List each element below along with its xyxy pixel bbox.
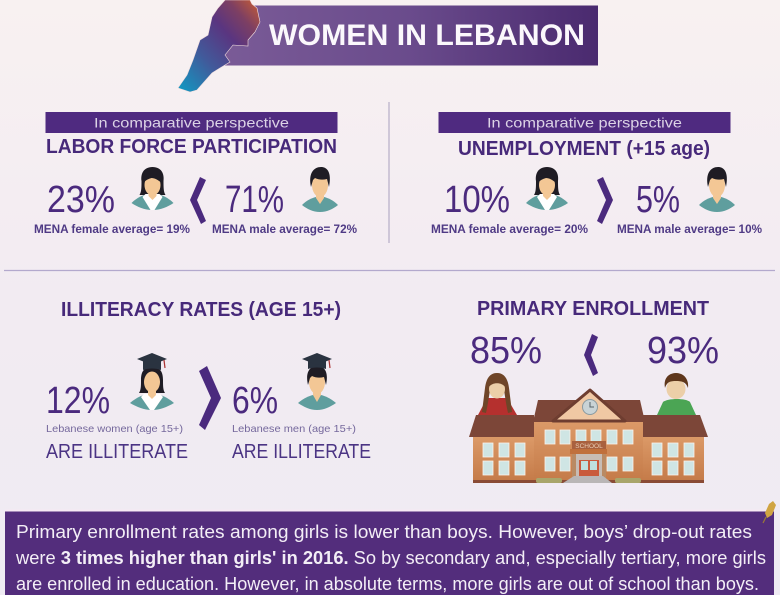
heading: ILLITERACY RATES (AGE 15+) <box>61 299 341 321</box>
icon: woman <box>526 167 568 210</box>
panel: unemployment <box>431 112 762 236</box>
school sign: SCHOOL <box>575 443 603 450</box>
heading: PRIMARY ENROLLMENT <box>477 298 709 320</box>
stat: men 5%: 5% <box>636 179 680 221</box>
icon: boy <box>657 373 696 415</box>
icon: man <box>699 167 735 212</box>
caption: MENA female average: MENA female average= 20% <box>431 224 588 236</box>
note line 2: were 3 times higher than girls' in 2016. So by secondary and, especially tertiary, more girls <box>15 548 766 568</box>
comparative bar <box>438 112 730 133</box>
stat: girls 85%: 85% <box>470 330 542 372</box>
arrow: greater than <box>597 177 613 224</box>
icon: woman <box>132 167 174 210</box>
caption: MENA female average: MENA female average= 19% <box>34 224 190 236</box>
label: men illiterate: ARE ILLITERATE <box>232 441 371 463</box>
callout: enrollment note <box>5 510 774 595</box>
comparative bar <box>46 112 338 133</box>
note line 1: Primary enrollment rates among girls is lower than boys. However, boys’ drop-out rates <box>16 522 752 542</box>
panel: primary enrollment <box>469 298 719 483</box>
icon: graduate man <box>298 353 336 410</box>
stat: men 6%: 6% <box>232 380 278 422</box>
title text: WOMEN IN LEBANON <box>269 19 585 52</box>
map of Lebanon icon <box>178 0 260 92</box>
arrow: less than <box>190 177 206 224</box>
title banner <box>222 6 598 66</box>
school entrance <box>536 449 641 483</box>
school sign <box>572 441 606 450</box>
arrow: greater than <box>199 366 221 430</box>
caption: Lebanese women: Lebanese women (age 15+) <box>46 423 183 435</box>
caption: MENA male average: MENA male average= 72% <box>212 224 357 236</box>
stat: women 10%: 10% <box>444 179 510 221</box>
comparative bar: In comparative perspective <box>94 114 289 130</box>
windows <box>483 430 694 475</box>
icon: man <box>302 167 338 212</box>
stat: men 71%: 71% <box>225 179 284 221</box>
stat: women 12%: 12% <box>46 380 110 422</box>
icon: graduate woman <box>130 353 174 410</box>
heading: UNEMPLOYMENT (+15 age) <box>458 138 710 160</box>
panel: labor force participation <box>34 112 357 236</box>
caption: Lebanese men: Lebanese men (age 15+) <box>232 423 356 435</box>
stat: boys 93%: 93% <box>647 330 719 372</box>
note line 3: are enrolled in education. However, in absolute terms, more girls are out of school than boys. <box>16 574 759 594</box>
panel: illiteracy rates <box>46 299 371 463</box>
comparative bar: In comparative perspective <box>487 114 682 130</box>
icon: pin <box>763 501 776 523</box>
heading: LABOR FORCE PARTICIPATION <box>46 136 337 158</box>
caption: MENA male average: MENA male average= 10% <box>617 224 762 236</box>
icon: girl <box>478 373 517 415</box>
arrow: less than <box>584 334 598 376</box>
label: women illiterate: ARE ILLITERATE <box>46 441 188 463</box>
stat: women 23%: 23% <box>47 179 115 221</box>
illustration: school building <box>469 390 708 483</box>
